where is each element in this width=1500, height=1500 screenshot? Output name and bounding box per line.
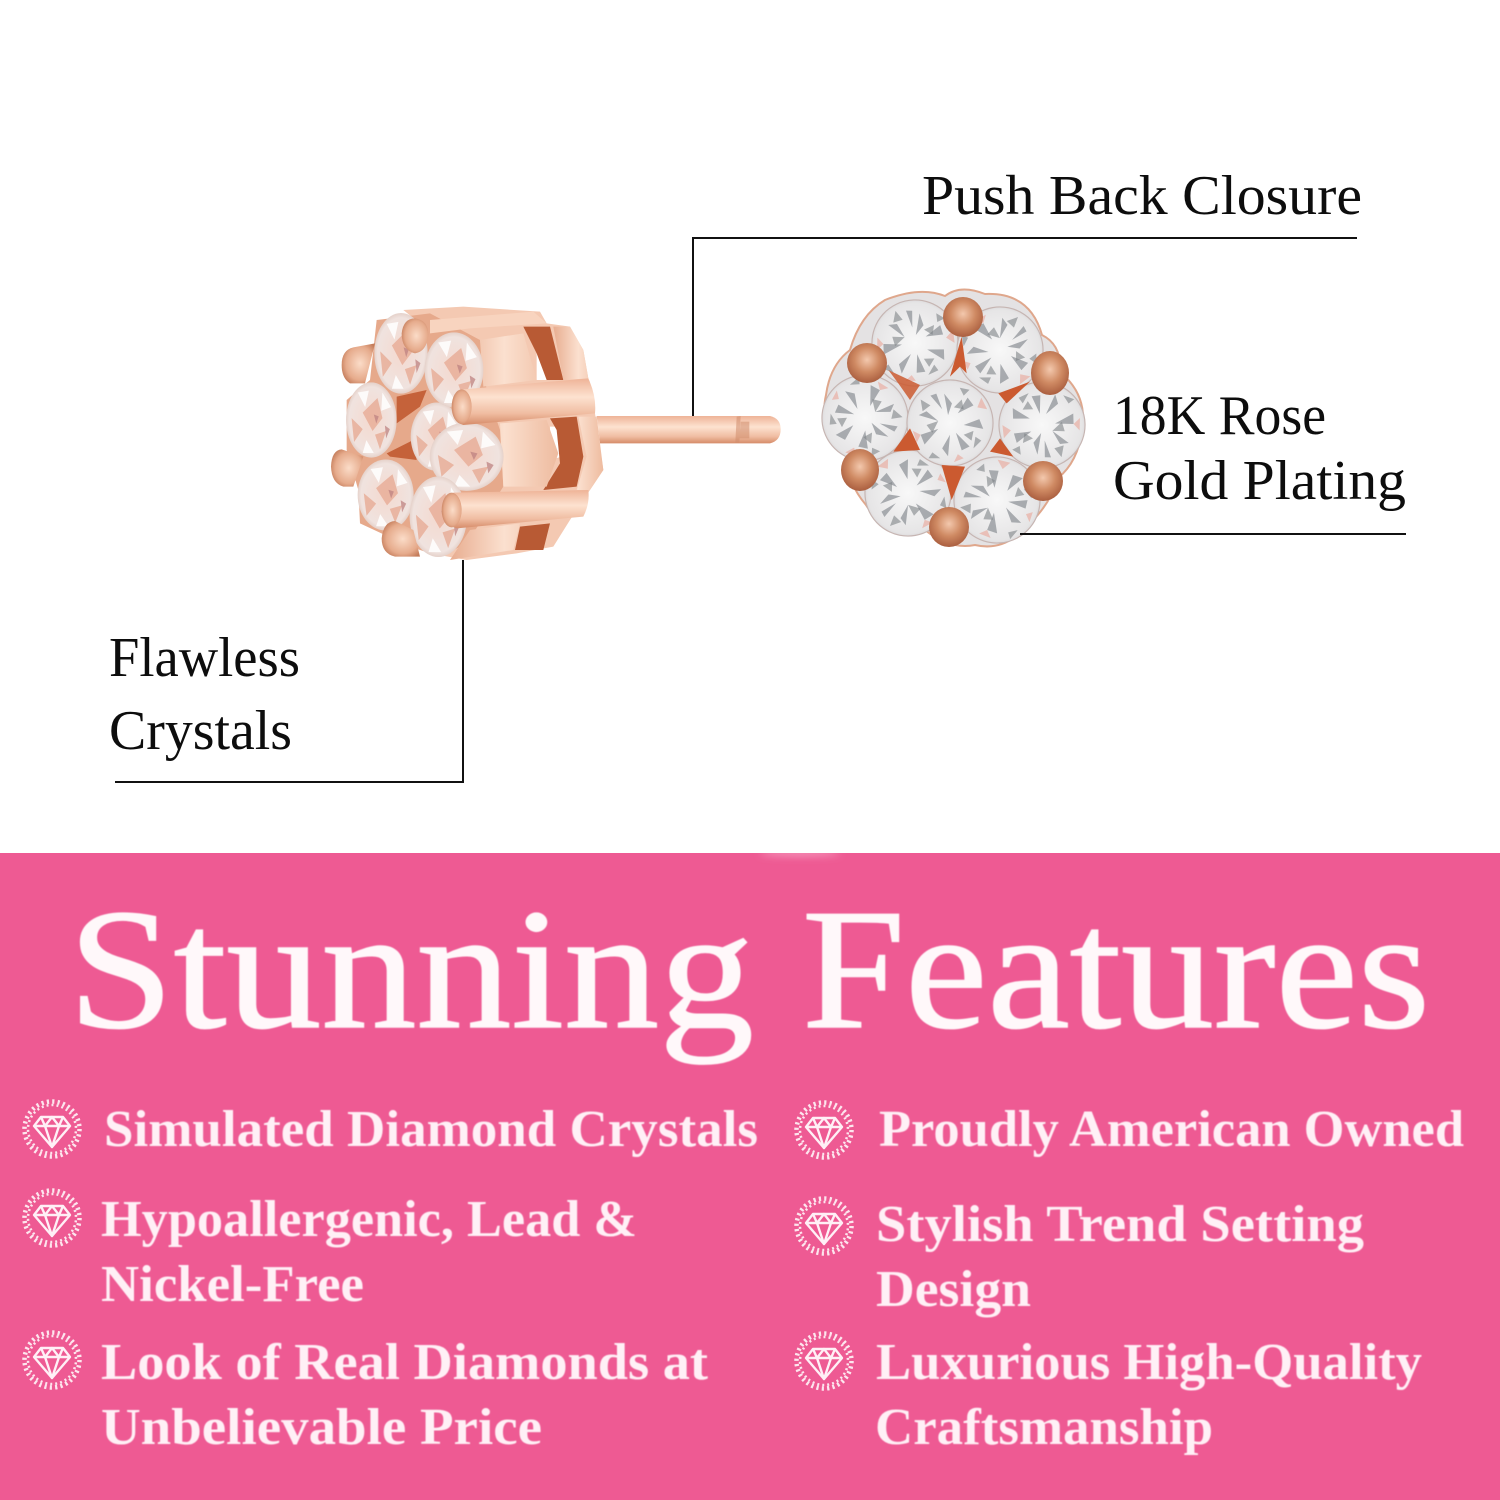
feature: proudly american owned: Proudly American Owned [879, 1101, 1464, 1158]
feature: luxurious craftsmanship: Craftsmanship [875, 1399, 1213, 1456]
label: rose gold plating: 18K Rose [1113, 385, 1326, 447]
feature: hypoallergenic [24, 1190, 637, 1313]
heading: Features [802, 875, 1430, 1065]
icon: diamond badge [796, 1198, 852, 1254]
earring crystals [346, 313, 504, 557]
metal gaps between crystals [888, 337, 1030, 500]
feature: look of real diamonds [24, 1332, 709, 1456]
label: flawless crystals: Crystals [109, 700, 292, 762]
earring prongs [331, 318, 595, 557]
label: rose gold plating: Gold Plating [1113, 450, 1406, 512]
label: push back closure: Push Back Closure [922, 165, 1362, 227]
leader line: push back closure [693, 238, 1357, 416]
icon: side view rose gold earring [331, 307, 781, 560]
panel background [0, 853, 1500, 1500]
feature: luxurious craftsmanship: Luxurious High-Quality [876, 1334, 1422, 1391]
heading: Stunning [68, 875, 754, 1065]
feature: look of real diamonds: Unbelievable Price [101, 1399, 542, 1456]
icon: diamond badge [24, 1332, 80, 1388]
feature: look of real diamonds: Look of Real Diamonds at [101, 1334, 709, 1391]
earring post [597, 416, 781, 443]
icon: diamond badge [796, 1102, 852, 1158]
feature: hypoallergenic: Nickel-Free [101, 1256, 364, 1313]
icon: front view rose gold earring [804, 288, 1097, 561]
icon: diamond badge [796, 1334, 852, 1388]
setting backing [824, 289, 1083, 546]
callout: rose gold plating [1020, 385, 1406, 534]
prongs [841, 297, 1069, 547]
feature: stylish trend setting [796, 1196, 1364, 1318]
feature: hypoallergenic: Hypoallergenic, Lead & [101, 1191, 637, 1248]
leader line: rose gold plating [1020, 533, 1406, 535]
feature: simulated diamond crystals: Simulated Diamond Crystals [104, 1101, 758, 1158]
feature: luxurious craftsmanship [796, 1334, 1422, 1456]
feature: stylish trend setting: Stylish Trend Setting [876, 1196, 1364, 1253]
callout: push back closure [693, 165, 1362, 416]
label: flawless crystals: Flawless [109, 627, 300, 689]
crystals [804, 288, 1097, 561]
leader line: flawless crystals [115, 560, 463, 782]
icon: diamond badge [24, 1102, 80, 1156]
callout: flawless crystals [109, 560, 463, 782]
panel: stunning features [0, 850, 1500, 1500]
feature: stylish trend setting: Design [876, 1261, 1031, 1318]
icon: diamond badge [24, 1190, 80, 1246]
earring setting body [347, 307, 603, 560]
